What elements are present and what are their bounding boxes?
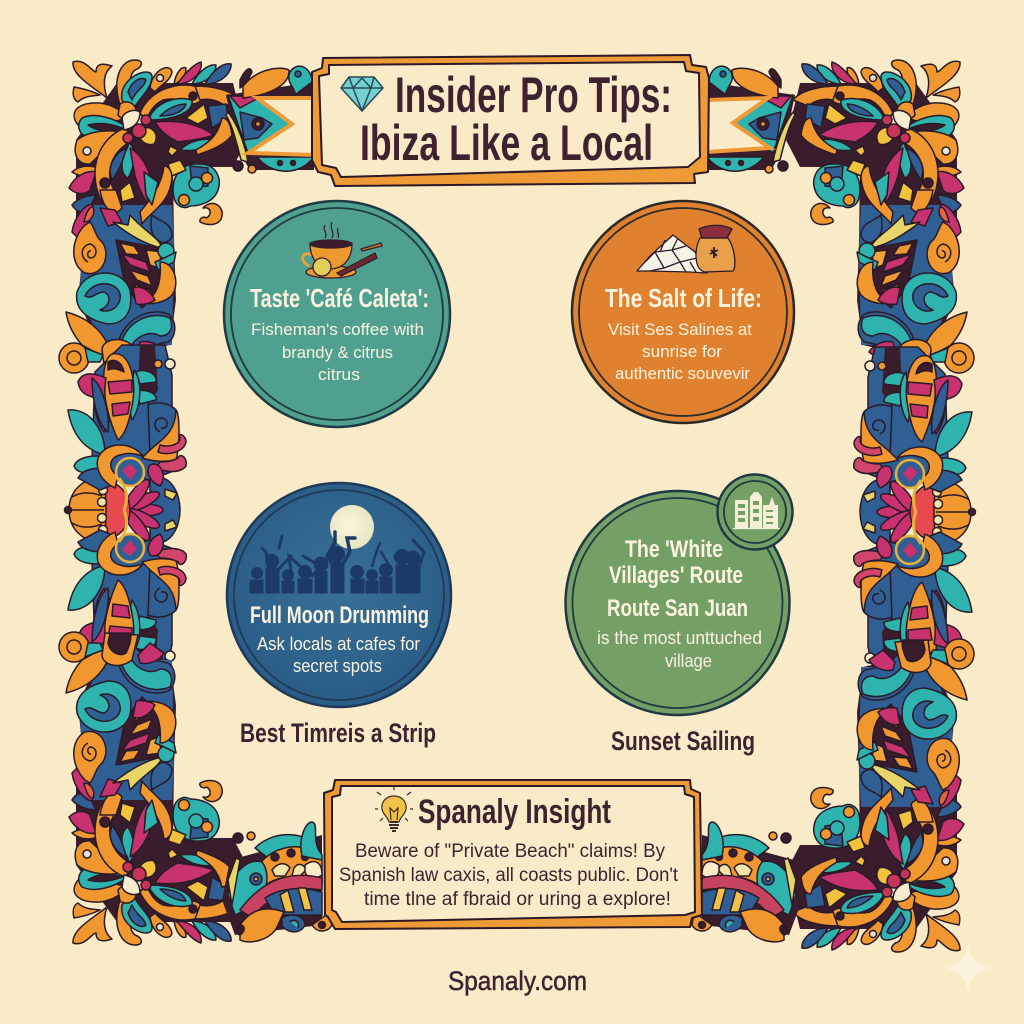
icon: coffee cup — [303, 222, 382, 278]
decorative frame: bottom-left arm — [222, 822, 332, 942]
callout body: Spanish law caxis, all coasts public. Don't — [339, 865, 679, 886]
heading: The Salt of Life: — [605, 283, 762, 313]
body text: secret spots — [293, 656, 382, 676]
banner ribbon right — [706, 98, 770, 152]
icon badge: white village buildings — [718, 474, 792, 550]
body text — [257, 634, 420, 676]
body text: Visit Ses Salines at — [608, 320, 752, 339]
heading: Taste 'Café Caleta': — [250, 283, 429, 313]
callout body — [339, 841, 679, 910]
body text: authentic souvevir — [615, 364, 750, 383]
body text — [597, 628, 762, 671]
title banner — [248, 55, 770, 186]
callout body: time tlne af fbraid or uring a explore! — [364, 889, 671, 910]
decorative frame: right side motif upper — [854, 347, 972, 512]
decorative frame: top-left arm — [226, 66, 314, 173]
icon: full moon — [330, 505, 374, 549]
title text: Insider Pro Tips: — [395, 67, 672, 123]
body text: Ask locals at cafes for — [257, 634, 420, 654]
icon: salt pile and sack — [637, 225, 735, 273]
decorative frame: left side centre — [64, 476, 180, 544]
title text — [360, 67, 672, 171]
icon: drummer crowd silhouettes — [250, 532, 424, 593]
decorative frame: bottom-right corner — [786, 639, 974, 952]
decorative frame: top-right corner — [786, 60, 974, 373]
decorative frame: top-right arm — [707, 66, 795, 173]
heading: Villages' Route — [609, 562, 743, 589]
panel: Salt of Life tip — [572, 201, 794, 423]
decorative frame: right side motif lower — [854, 512, 972, 677]
body text — [608, 320, 752, 383]
decorative frame: top-left corner — [59, 60, 247, 373]
heading: Full Moon Drumming — [250, 602, 429, 629]
icon: diamond — [341, 77, 383, 111]
body text: Fisheman's coffee with — [251, 320, 424, 339]
decorative frame: left side motif lower — [68, 510, 186, 675]
body text — [251, 320, 424, 384]
label: sunset sailing: Sunset Sailing — [611, 726, 755, 756]
heading: Route San Juan — [607, 595, 748, 622]
panel: Café Caleta tip — [224, 201, 450, 427]
decorative frame: bottom-left corner — [59, 632, 247, 945]
body text: village — [665, 651, 712, 671]
title text: Ibiza Like a Local — [360, 115, 653, 171]
icon: light bulb — [375, 787, 413, 831]
label: best time: Best Timreis a Strip — [240, 718, 436, 748]
banner ribbon left — [248, 98, 314, 155]
body text: sunrise for — [642, 342, 722, 361]
panel: Full Moon Drumming tip — [227, 483, 451, 707]
footer brand: Spanaly.com — [448, 966, 587, 996]
heading — [607, 536, 748, 622]
body text: citrus — [318, 365, 360, 384]
banner plate — [312, 55, 709, 186]
decorative frame: left side motif upper — [68, 345, 186, 510]
panel: Spanaly Insight callout — [324, 780, 702, 929]
heading: The 'White — [625, 536, 723, 563]
icon: sparkle watermark — [945, 945, 991, 991]
decorative frame: right side centre — [860, 478, 976, 546]
body text: brandy & citrus — [282, 343, 393, 362]
callout heading: Spanaly Insight — [418, 793, 611, 831]
body text: is the most unttuched — [597, 628, 762, 648]
decorative frame: bottom-right arm — [692, 822, 802, 942]
panel: White Villages tip — [566, 474, 792, 715]
callout body: Beware of "Private Beach" claims! By — [355, 841, 665, 862]
